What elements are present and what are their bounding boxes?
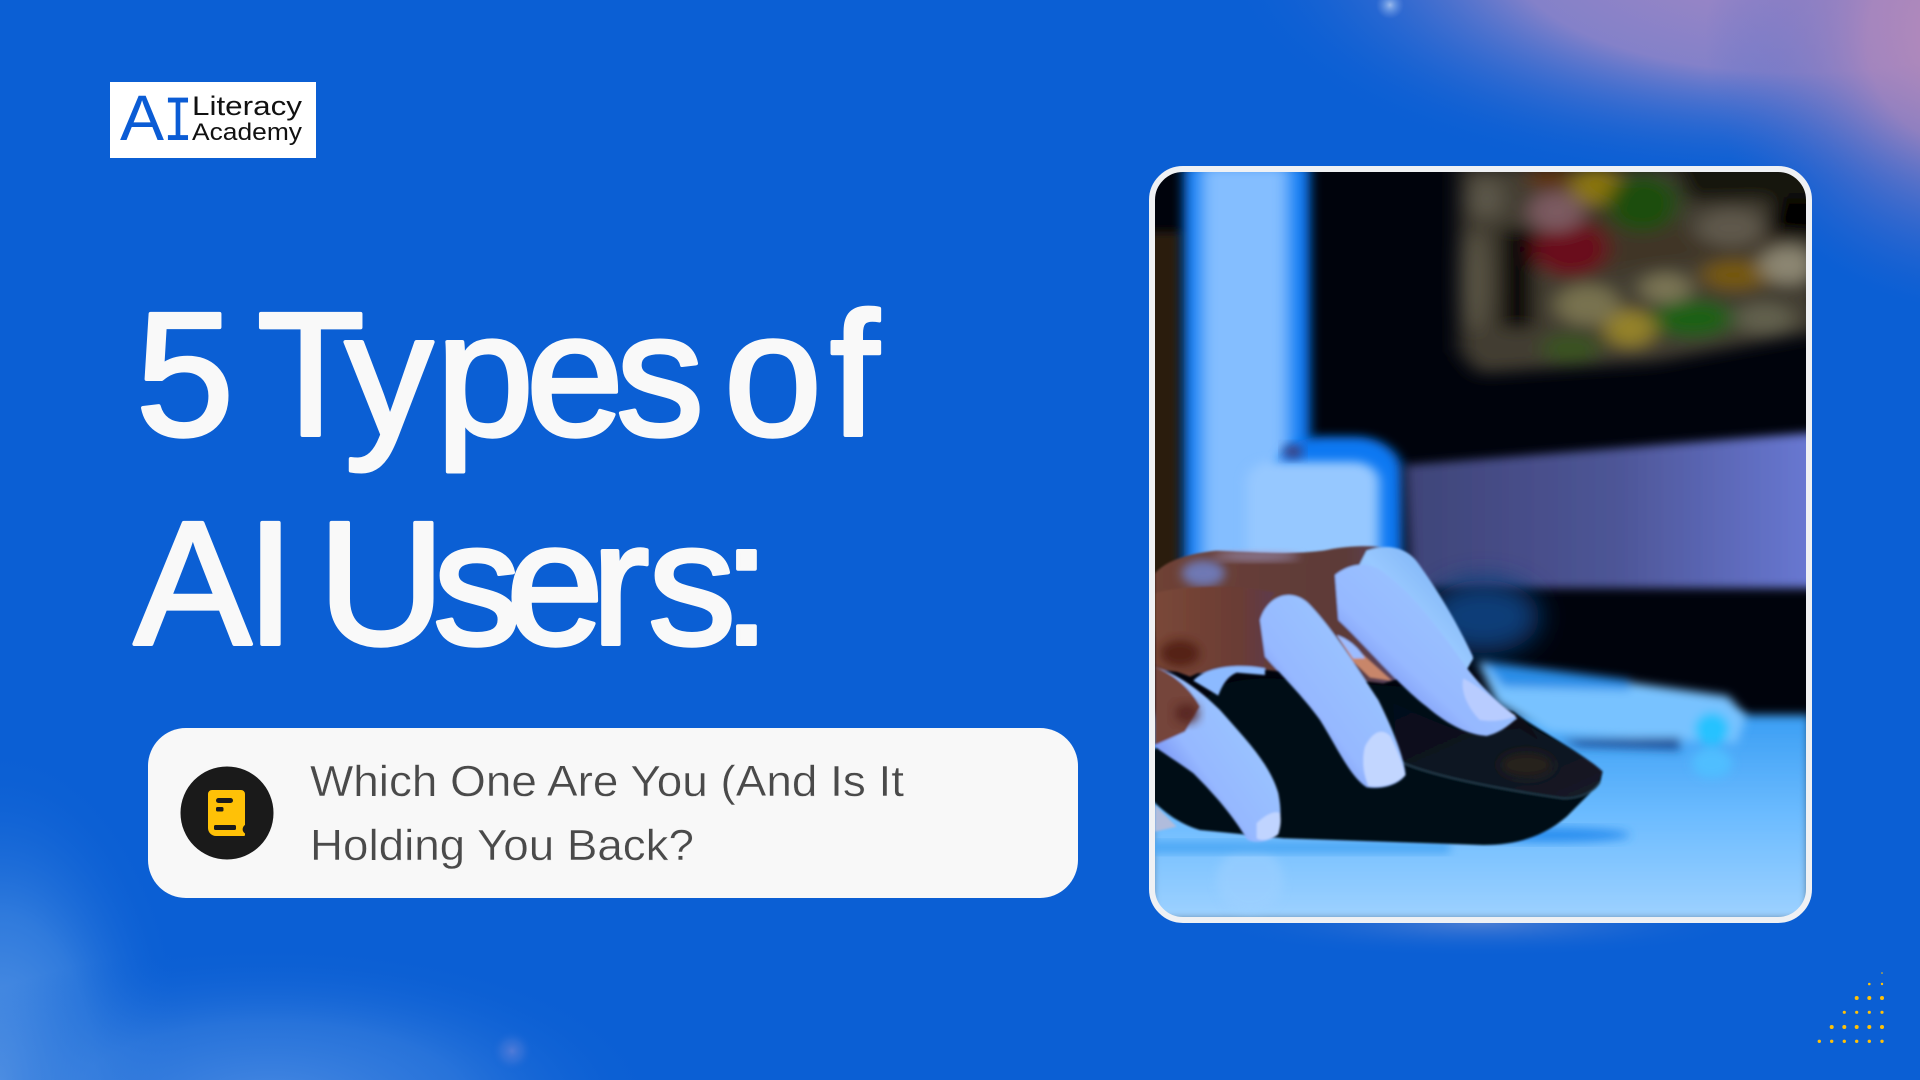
logo xyxy=(110,82,316,160)
monitor screen xyxy=(1459,162,1819,373)
logo: Academy xyxy=(192,119,303,146)
icon: book in circle xyxy=(180,766,274,860)
ring finger xyxy=(1357,547,1473,670)
blurred background of photo xyxy=(1146,162,1823,632)
subtitle text: Holding You Back? xyxy=(310,822,694,870)
dark strip xyxy=(1155,228,1183,631)
blue wall bar xyxy=(1184,165,1310,585)
desk edge under hand xyxy=(1150,842,1450,853)
middle finger xyxy=(1335,565,1517,736)
photo frame xyxy=(1152,169,1809,920)
rounded blob xyxy=(1272,428,1410,554)
dark blue haze under monitor xyxy=(1427,580,1540,653)
photo: hand on computer mouse xyxy=(1146,162,1823,922)
title: 5 Types of xyxy=(136,277,880,473)
keyboard paper xyxy=(1478,662,1747,778)
logo: Literacy xyxy=(192,91,303,121)
back of hand xyxy=(1155,546,1473,683)
sliver behind index xyxy=(1337,635,1392,681)
hand xyxy=(1155,546,1517,842)
desk xyxy=(1150,715,1810,922)
title: AI Users: xyxy=(134,486,771,682)
light gap xyxy=(1193,666,1265,696)
brown side of index xyxy=(1155,586,1275,677)
subtitle text: Which One Are You (And Is It xyxy=(310,758,904,806)
little finger xyxy=(1155,667,1280,842)
title xyxy=(134,277,880,682)
logo: I xyxy=(163,88,193,160)
desk reflections xyxy=(1470,828,1630,842)
lower photo xyxy=(1147,546,1810,922)
logo: A xyxy=(120,82,164,154)
decorative dots xyxy=(1818,972,1884,1043)
computer mouse xyxy=(1147,678,1603,845)
index finger xyxy=(1260,595,1406,788)
subtitle text xyxy=(310,758,904,870)
subtitle pill xyxy=(148,728,1078,898)
monitor base xyxy=(1405,432,1823,588)
